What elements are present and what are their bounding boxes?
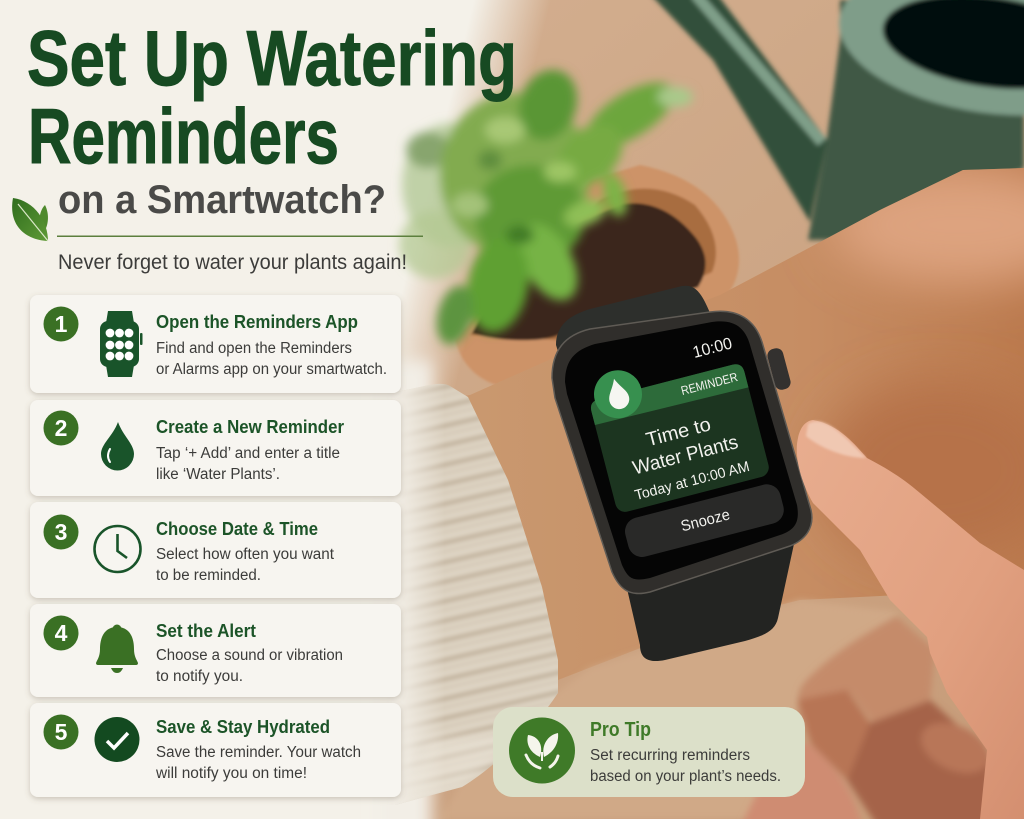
- subtitle: on a Smartwatch?: [58, 178, 386, 222]
- step 2 heading: Create a New Reminder: [156, 416, 344, 437]
- notification title: [624, 408, 741, 479]
- step 4 number: [44, 616, 78, 650]
- icon: sprout badge: [509, 718, 575, 784]
- pot body: [455, 165, 739, 389]
- step 2 text: Tap ‘+ Add’ and enter a title: [156, 445, 340, 462]
- icon: smartwatch: [100, 311, 142, 377]
- step 4 text: to notify you.: [156, 668, 243, 685]
- can rim: [829, 0, 1024, 133]
- step 2 number: [44, 410, 78, 446]
- step 4 text: Choose a sound or vibration: [156, 647, 343, 664]
- step 3 text: to be reminded.: [156, 567, 261, 584]
- notification title: Time to: [644, 413, 713, 451]
- step 2 text: [156, 445, 340, 483]
- step 5 text: will notify you on time!: [155, 765, 307, 782]
- step 4 number: 4: [55, 620, 68, 646]
- can body: [808, 0, 1024, 240]
- tagline: Never forget to water your plants again!: [58, 251, 407, 274]
- step 1 text: [156, 340, 387, 378]
- palm: [847, 700, 990, 819]
- step 3 text: [156, 546, 335, 584]
- knuckle: [913, 713, 997, 783]
- pro tip panel: [493, 707, 805, 797]
- can spout: [650, 0, 827, 222]
- icon: check mark: [94, 717, 140, 762]
- snooze button: Snooze: [679, 506, 732, 535]
- step 4 text: [156, 647, 343, 685]
- title: Reminders: [28, 92, 339, 180]
- step 4 card: [30, 604, 401, 697]
- step 5 text: Save the reminder. Your watch: [156, 744, 361, 761]
- soil: [472, 203, 706, 340]
- snooze button: [622, 481, 787, 560]
- plant pot with soil: [455, 165, 739, 389]
- step 4 heading: Set the Alert: [156, 620, 256, 641]
- step 2 card: [30, 400, 401, 496]
- title: Set Up Watering: [27, 14, 517, 102]
- lower cream fade: [380, 360, 432, 819]
- icon: water drop: [101, 422, 134, 470]
- notification time: Today at 10:00 AM: [633, 459, 751, 504]
- blurred green plant: [399, 62, 693, 348]
- step 5 number: 5: [55, 719, 68, 745]
- step 5 card: [30, 703, 401, 797]
- icon: bell: [96, 624, 138, 673]
- divider: [57, 236, 423, 237]
- pro tip heading: Pro Tip: [590, 718, 651, 741]
- pro tip text: Set recurring reminders: [590, 747, 750, 764]
- reminder label: REMINDER: [680, 370, 739, 398]
- lower curled finger: [798, 690, 870, 780]
- table area under arm: [440, 600, 900, 819]
- step 5 text: [155, 744, 361, 782]
- step 1 number: 1: [55, 311, 68, 337]
- step 1 number: [44, 306, 78, 342]
- fingernail: [806, 421, 866, 458]
- step 1 card: [30, 295, 401, 393]
- watch notification content: [581, 332, 787, 561]
- knit sweater cuff: [395, 375, 565, 815]
- step 1 text: Find and open the Reminders: [156, 340, 352, 357]
- step 3 number: 3: [55, 519, 67, 545]
- watch strap bottom: [625, 530, 797, 661]
- thumb: [740, 743, 863, 819]
- pro tip text: [590, 747, 781, 785]
- reminder header band: [589, 362, 748, 427]
- notification title: Water Plants: [630, 431, 741, 479]
- step 3 card: [30, 502, 401, 598]
- pot inner wall: [470, 189, 716, 340]
- step 5 number: [44, 714, 78, 750]
- upper curled finger: [799, 617, 935, 745]
- step 2 text: like ‘Water Plants’.: [156, 466, 280, 483]
- notification panel: [589, 362, 771, 514]
- step 1 text: or Alarms app on your smartwatch.: [156, 361, 387, 378]
- title: [27, 14, 517, 180]
- pro tip callout: [493, 707, 805, 797]
- step 5 heading: Save & Stay Hydrated: [156, 716, 330, 737]
- step 3 number: [44, 514, 78, 550]
- left cream panel: [0, 0, 400, 819]
- status time: 10:00: [691, 334, 734, 362]
- can opening: [877, 0, 1024, 102]
- pro tip text: based on your plant’s needs.: [590, 768, 781, 785]
- step 3 text: Select how often you want: [156, 546, 335, 563]
- watch crown: [766, 347, 792, 391]
- lower hand fingers: [740, 617, 997, 819]
- watch case: [552, 311, 812, 594]
- step 1 heading: Open the Reminders App: [156, 311, 358, 332]
- step 3 heading: Choose Date & Time: [156, 518, 318, 539]
- icon: clock: [94, 526, 140, 572]
- watering can: [650, 0, 1024, 240]
- arm: [430, 160, 1024, 690]
- cream fade into photo: [395, 0, 600, 819]
- watch screen: [565, 321, 798, 579]
- step 2 number: 2: [55, 415, 67, 441]
- drop badge: [589, 365, 647, 423]
- index finger: [797, 420, 1024, 819]
- icon: leaves: [12, 198, 48, 241]
- watch strap top: [556, 286, 712, 358]
